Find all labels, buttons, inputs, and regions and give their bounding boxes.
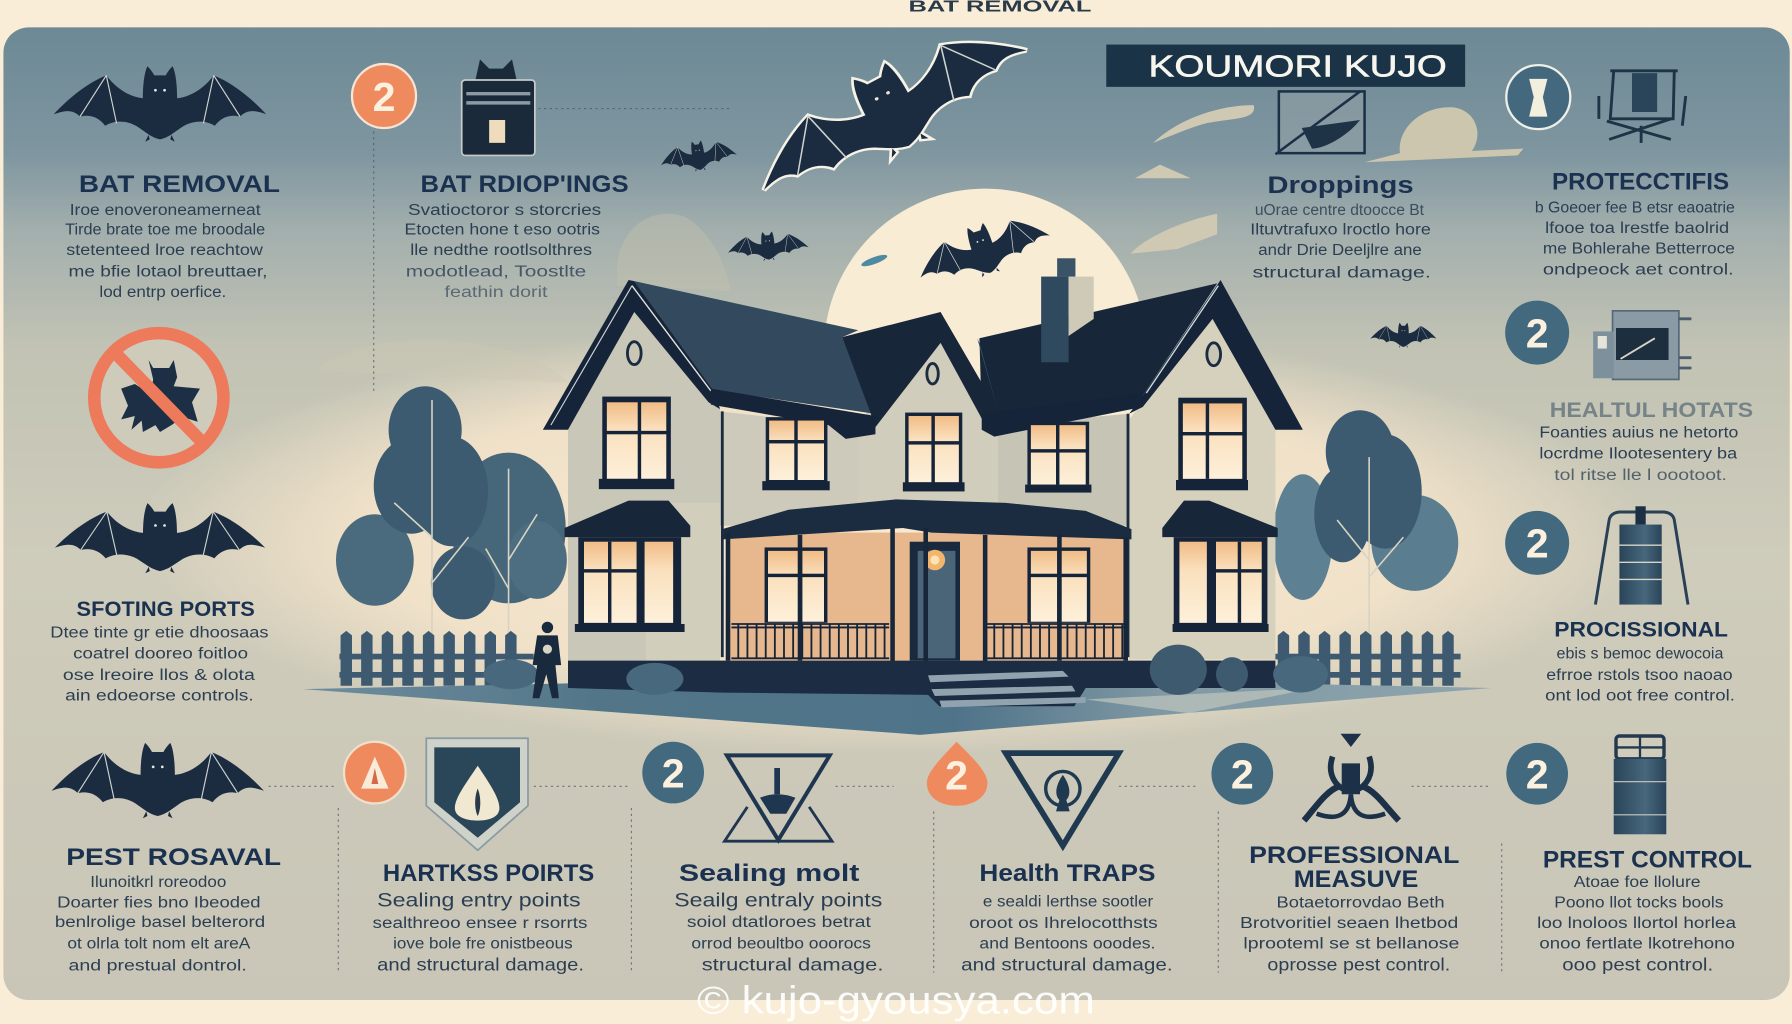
text: sealing description: Seailg entraly points	[674, 889, 882, 911]
heading: bat droppings: BAT RDIOP'INGS	[421, 171, 629, 198]
section: Droppings	[1250, 91, 1431, 282]
text: droppings description: Etocten hone t eso ootris	[405, 221, 600, 238]
text: health description: oroot os Ihrelocotthsts	[969, 915, 1158, 932]
section: Healthy Habitats	[1505, 301, 1753, 484]
banner: KOUMORI KUJO: KOUMORI KUJO	[1149, 49, 1447, 84]
trees left	[336, 386, 567, 634]
chimney	[1041, 258, 1094, 362]
number badge: 2	[1526, 521, 1549, 567]
badge	[1506, 743, 1568, 805]
text: sealing description: structural damage.	[702, 954, 883, 974]
section: Protection	[1506, 65, 1735, 278]
icon: bat	[55, 503, 265, 573]
decorative clouds	[320, 105, 1523, 383]
text: bat removal description: Tirde brate toe me broodale	[65, 221, 265, 238]
house	[483, 258, 1328, 707]
text: pest control description: ooo pest control.	[1562, 954, 1713, 974]
dashed guide lines	[269, 109, 1502, 973]
window upper left	[599, 397, 674, 489]
badge	[642, 742, 704, 803]
number badge: 2	[1526, 310, 1549, 356]
text: professional description: efrroe rstols tsoo naoao	[1546, 667, 1733, 684]
heading: sealing: Sealing molt	[679, 860, 859, 887]
text: health description: e sealdi lerthse sootler	[983, 893, 1153, 910]
number badge	[1505, 301, 1569, 365]
heading: harmless points: HARTKSS POIRTS	[383, 860, 594, 887]
walls	[568, 312, 1275, 663]
text: pest description: and prestual dontrol.	[69, 957, 247, 974]
text: protection description: b Goeoer fee B etsr eaoatrie	[1535, 200, 1735, 217]
text: pest description: Ilunoitkrl roreodoo	[90, 874, 226, 891]
text: bat removal description: lod entrp oerfice.	[99, 284, 226, 301]
window upper 3	[903, 413, 965, 491]
text: professional measure description: oprosse pest control.	[1267, 954, 1450, 974]
steps	[928, 671, 1086, 707]
moon	[824, 189, 1146, 511]
text: harmless description: and structural damage.	[377, 954, 584, 974]
text: professional description	[1545, 645, 1735, 705]
text: healthy description: Foanties auius ne hetorto	[1539, 425, 1738, 442]
heading: professional measure	[1249, 842, 1459, 893]
text: pest description: benlrolige basel belterord	[55, 914, 265, 931]
text: professional measure description: Botaetorrovdao Beth	[1277, 894, 1445, 911]
bottom: Professional Measure	[1211, 735, 1459, 974]
section: Professional	[1505, 506, 1735, 705]
text: pest description: ot olrla tolt nom elt areA	[67, 936, 251, 953]
text: pest control description: Atoae foe llolure	[1574, 874, 1701, 891]
roof left	[634, 281, 874, 414]
text: pest control description: Poono llot tocks bools	[1554, 894, 1724, 911]
banner: KOUMORI KUJO	[1106, 45, 1465, 87]
badge: 2	[1526, 752, 1549, 798]
text: spotting description	[50, 625, 269, 705]
small bat 2	[727, 229, 809, 263]
front door	[910, 542, 960, 661]
gutters	[711, 389, 875, 439]
text: droppings body: uOrae centre dtoocce Bt	[1255, 202, 1425, 219]
text: droppings description: feathin dorit	[445, 284, 548, 301]
window upper 4	[1025, 422, 1091, 493]
text: harmless description: sealthreoo ensee r rsorrts	[373, 915, 588, 932]
gable vents	[627, 342, 1221, 384]
badge: 2	[662, 750, 685, 796]
watermark: © kujo-gyousya.com	[697, 980, 1095, 1023]
icon: chair equipment	[1599, 71, 1686, 143]
bottom: Pest Control	[1506, 736, 1752, 974]
text: droppings body	[1250, 202, 1431, 282]
heading: pest removal: PEST ROSAVAL	[66, 844, 281, 871]
text: droppings description	[405, 202, 601, 301]
badge: orange warning	[344, 742, 406, 803]
section: Spotting Ports	[50, 333, 269, 705]
icon: no-bat sign	[94, 333, 223, 462]
icon: biohazard figure	[1304, 735, 1399, 821]
text: healthy description	[1539, 425, 1738, 484]
number badge	[1505, 511, 1569, 575]
porch posts	[728, 528, 1126, 672]
text: professional description: ebis s bemoc dewocoia	[1557, 645, 1724, 662]
heading: professional measure: MEASUVE	[1294, 866, 1418, 893]
window upper right	[1176, 398, 1248, 490]
text: sealing description: orrod beoultbo ooorocs	[691, 936, 871, 953]
text: pest control description: onoo fertlate lkotrehono	[1539, 936, 1735, 953]
text: sealing description	[674, 889, 883, 974]
bottom: Harmless Points	[344, 738, 594, 974]
icon: droppings frame	[1275, 91, 1365, 154]
icon: triangle sign	[725, 755, 832, 841]
number badge hourglass	[1506, 65, 1570, 129]
badge: 2	[1231, 752, 1254, 798]
text: health description: and structural damage.	[961, 954, 1173, 974]
icon: cylinder	[1614, 736, 1666, 834]
text: droppings body: structural damage.	[1253, 265, 1431, 282]
heading: healthy habitats: HEALTUL HOTATS	[1550, 397, 1753, 422]
text: droppings body: andr Drie Deeljlre ane	[1258, 242, 1422, 259]
porch railings	[731, 624, 1126, 658]
heading: professional: PROCISSIONAL	[1554, 617, 1728, 642]
text: health description	[961, 893, 1173, 974]
text: harmless description: Sealing entry points	[377, 889, 581, 911]
text: spotting description: coatrel dooreo foitloo	[73, 645, 248, 662]
text: droppings description: modotlead, Toostlte	[406, 264, 586, 281]
text: bat removal description: stetenteed lroe reachtow	[66, 242, 264, 259]
number badge orange	[352, 64, 416, 128]
ground	[303, 683, 1491, 735]
bushes	[483, 645, 1328, 695]
text: professional measure description	[1240, 894, 1459, 974]
icon: truck	[1593, 311, 1691, 379]
text: harmless description	[373, 889, 588, 974]
left gable trim	[543, 280, 720, 430]
text: sealing description: soiol dtatloroes betrat	[687, 914, 872, 931]
text: spotting description: ose lreoire llos & olota	[63, 667, 255, 684]
roof right	[979, 283, 1217, 417]
icon: shield	[426, 738, 528, 850]
porch windows	[765, 547, 1090, 623]
heading: professional measure: PROFESSIONAL	[1249, 842, 1459, 869]
text: bat removal description: me bfie lotaol breuttaer,	[69, 264, 267, 281]
badge: orange drop	[927, 742, 987, 806]
text: droppings description: Svatioctoror s storcries	[408, 202, 601, 219]
porch roof	[722, 499, 1131, 539]
number badge orange: 2	[373, 74, 395, 120]
text: professional measure description: lprooteml se st bellanose	[1243, 936, 1459, 953]
text: droppings description: lle nedthe rootlsolthres	[410, 242, 592, 259]
bay window left	[565, 501, 690, 632]
trees right	[1273, 410, 1458, 634]
text: pest control description	[1537, 874, 1737, 974]
text: spotting description: Dtee tinte gr etie dhoosaas	[50, 625, 269, 642]
text: protection description	[1535, 200, 1735, 278]
middle bat in moon	[910, 204, 1056, 295]
heading: pest control: PREST CONTROL	[1543, 846, 1752, 873]
icon: attic box	[462, 59, 535, 155]
warm glow behind house	[137, 320, 1646, 754]
text: bat removal description: Iroe enoveroneamerneat	[70, 202, 261, 219]
text: pest description: Doarter fies bno Ibeoded	[57, 894, 261, 911]
text: spotting description: ain edoeorse controls.	[65, 688, 254, 705]
heading: spotting ports: SFOTING PORTS	[77, 596, 255, 621]
icon: tank on stand	[1595, 506, 1688, 605]
big bat with white outline	[738, 2, 1042, 218]
person figure	[533, 622, 561, 698]
bottom: Sealing	[642, 742, 883, 974]
fence left	[339, 631, 534, 686]
text: healthy description: tol ritse lle l oootoot.	[1554, 467, 1727, 484]
heading: protection: PROTECCTIFIS	[1552, 169, 1729, 196]
text: professional description: ont lod oot free control.	[1545, 688, 1735, 705]
icon: bat	[54, 66, 266, 142]
text: droppings body: Iltuvtrafuxo lroctlo hore	[1250, 221, 1431, 238]
text: bat removal description	[65, 202, 267, 301]
heading: bat removal: BAT REMOVAL	[79, 171, 280, 198]
window upper 2	[762, 417, 830, 490]
heading: droppings: Droppings	[1267, 172, 1414, 199]
badge	[1211, 743, 1273, 805]
centre gable roof	[842, 312, 998, 429]
right gable trim	[1129, 280, 1303, 430]
text: protection description: ondpeock aet control.	[1543, 261, 1734, 278]
text: health description: and Bentoons ooodes.	[979, 936, 1155, 953]
text: harmless description: iove bole fre onistbeous	[393, 936, 573, 953]
section: Bat Droppings	[352, 59, 629, 301]
small bat 3	[1370, 323, 1436, 348]
icon: bat	[51, 743, 264, 818]
bottom: Pest Removal	[51, 743, 281, 974]
icon: warning triangle	[1006, 753, 1119, 846]
bay window right	[1162, 501, 1278, 632]
foundation	[568, 661, 1275, 706]
bottom: Health Traps	[927, 742, 1173, 974]
text: protection description: me Bohlerahe Betterroce	[1543, 241, 1735, 258]
small bat 1	[658, 136, 738, 176]
badge: orange drop: 2	[945, 753, 968, 799]
small teal mark on moon	[860, 253, 888, 268]
text: pest control description: loo lnoloos llortol horlea	[1537, 915, 1737, 932]
heading: health traps: Health TRAPS	[979, 860, 1155, 887]
section: Bat Removal	[54, 66, 280, 301]
text: healthy description: locrdme Ilootesentery ba	[1539, 445, 1738, 462]
text: pest description	[55, 874, 265, 974]
fence right	[1274, 631, 1461, 686]
text: professional measure description: Brotvoritiel seaen lhetbod	[1240, 915, 1458, 932]
text: protection description: lfooe toa lrestfe baolrid	[1545, 220, 1729, 237]
